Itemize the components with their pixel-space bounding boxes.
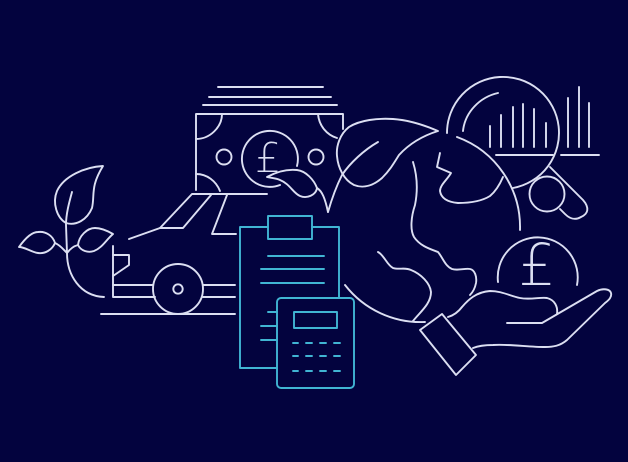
pound sign on coin: £: [519, 231, 555, 299]
icon: globe: [345, 137, 520, 322]
icon: clipboard: [240, 216, 339, 368]
icon: open hand: [420, 289, 611, 375]
icon: seedling plant: [19, 166, 113, 297]
icon: calculator: [277, 298, 354, 388]
icon: car: [101, 194, 267, 314]
icon: large leaf: [328, 119, 438, 212]
icon: magnifying glass with bar chart: [447, 77, 599, 219]
icon: pound coin: [498, 231, 578, 299]
icon: banknote stack: [196, 87, 343, 191]
pound sign on banknote: £: [255, 134, 281, 182]
icon: small leaf on banknote: [267, 170, 328, 212]
